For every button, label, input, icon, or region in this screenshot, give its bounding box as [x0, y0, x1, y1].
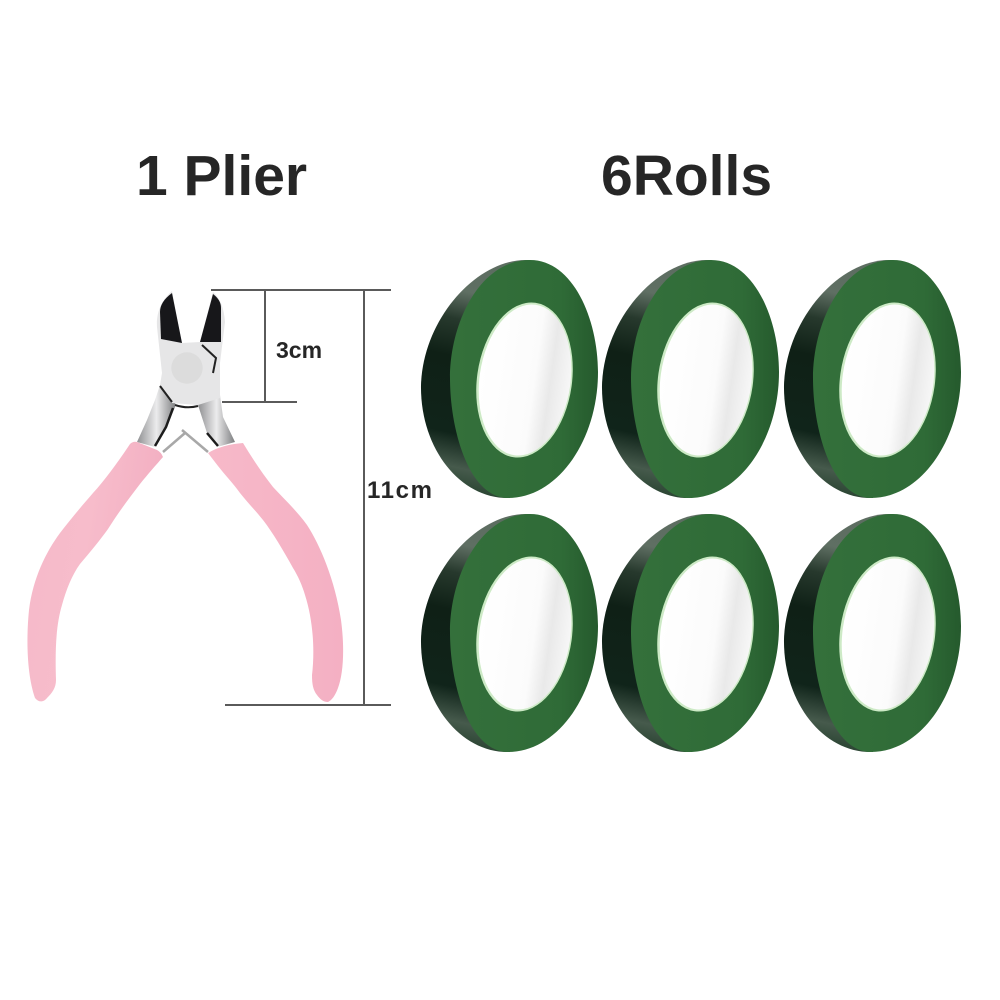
- head dark lines: [160, 345, 216, 407]
- right arm inner dark edge: [207, 433, 218, 446]
- roll 3: [784, 260, 961, 498]
- left arm inner dark edge: [155, 408, 173, 446]
- left jaw: [160, 293, 182, 343]
- right pink handle: [208, 443, 343, 702]
- roll 4: [421, 514, 598, 752]
- left pink handle: [27, 442, 163, 701]
- roll 5: [602, 514, 779, 752]
- dimension: 3cm: [211, 290, 322, 402]
- roll 1: [421, 260, 598, 498]
- rolls grid: [421, 260, 961, 752]
- plier head: [157, 291, 225, 405]
- left metal arm: [137, 385, 176, 447]
- pivot rivet: [171, 352, 203, 384]
- heading: 1 Plier: 1 Plier: [136, 144, 307, 208]
- dimension: 11cm: [225, 290, 432, 705]
- heading: 6Rolls: 6Rolls: [601, 144, 772, 208]
- spring: [163, 430, 208, 452]
- roll 2: [602, 260, 779, 498]
- dimension: 11cm: 11cm: [367, 477, 432, 504]
- roll 6: [784, 514, 961, 752]
- plier illustration: [27, 291, 343, 702]
- right jaw: [200, 294, 221, 342]
- right metal arm: [198, 395, 235, 447]
- dimension: 3cm: 3cm: [276, 337, 322, 363]
